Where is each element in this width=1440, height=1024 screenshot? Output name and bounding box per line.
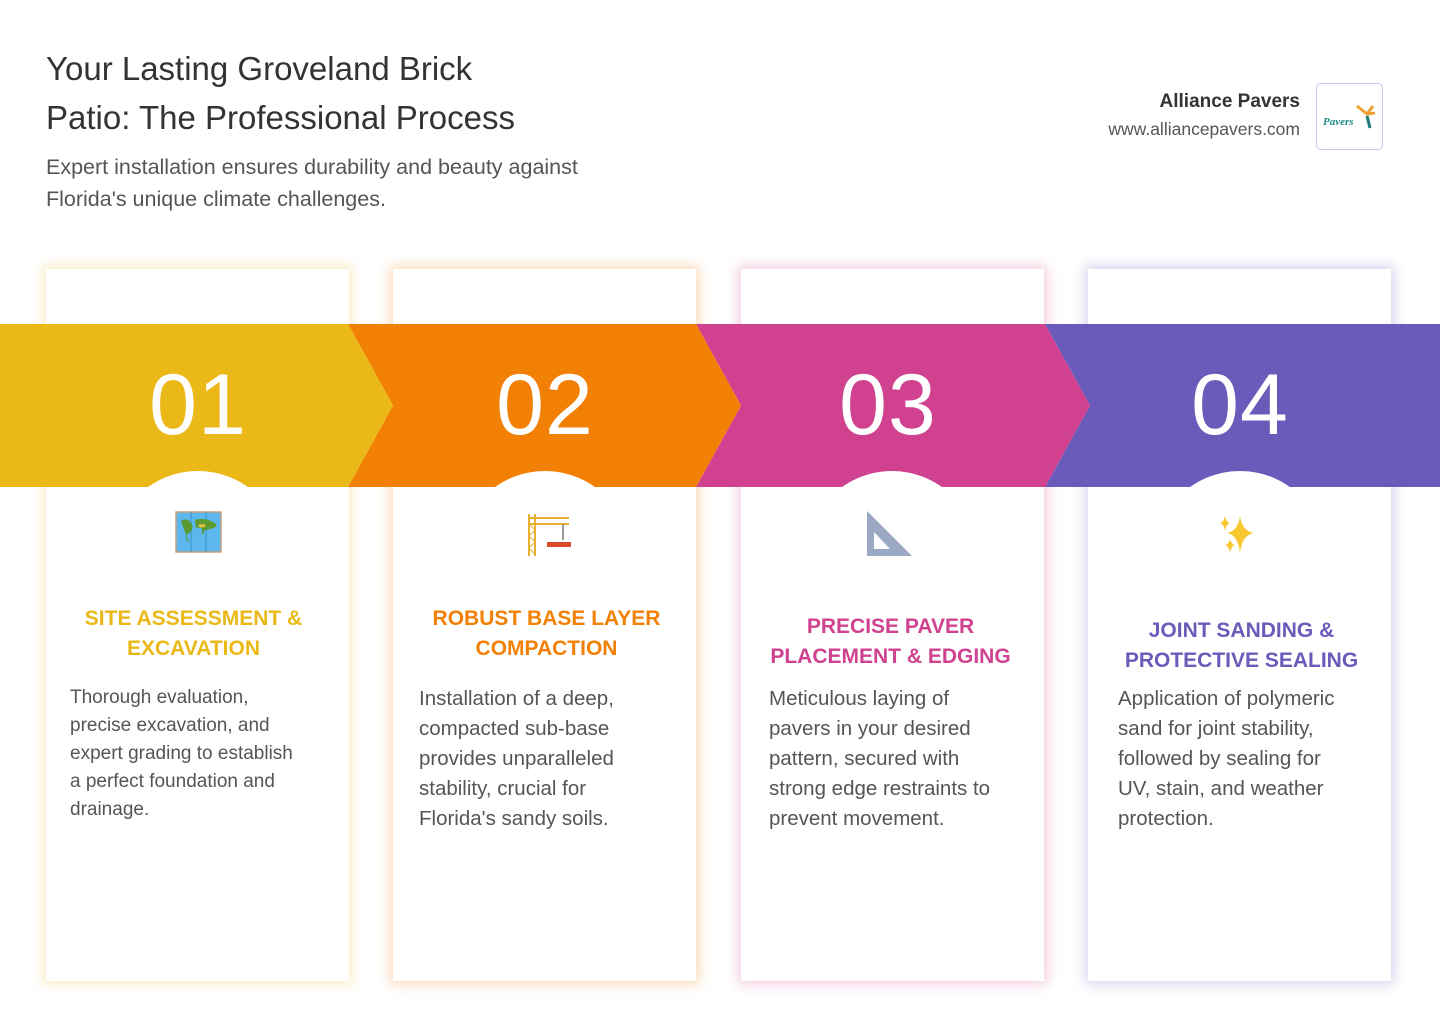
text 4: Application of polymeric sand for joint stability, followed by sealing for UV, stain, and weather protection. bbox=[1118, 687, 1334, 830]
number 02: 02 bbox=[496, 357, 594, 453]
subtitle: Expert installation ensures durability and beauty against Florida's unique climate challenges. bbox=[46, 155, 578, 211]
heading 4: PROTECTIVE SEALING bbox=[1125, 649, 1358, 672]
brand block bbox=[1108, 83, 1383, 150]
text 3: Meticulous laying of pavers in your desired pattern, secured with strong edge restraints to prevent movement. bbox=[769, 687, 990, 830]
card 3 bbox=[741, 269, 1044, 981]
card 1 bbox=[46, 269, 349, 981]
number 04: 04 bbox=[1191, 357, 1289, 453]
logo: Pavers bbox=[1323, 116, 1354, 128]
number 03: 03 bbox=[839, 357, 937, 453]
heading 2: COMPACTION bbox=[476, 637, 617, 660]
card 4 bbox=[1088, 269, 1391, 981]
arrow band bbox=[0, 324, 1440, 487]
icon: set square bbox=[867, 511, 912, 556]
text 2: Installation of a deep, compacted sub-base provides unparalleled stability, crucial for Florida's sandy soils. bbox=[419, 687, 614, 830]
heading 1 bbox=[85, 607, 302, 660]
heading 3 bbox=[770, 615, 1011, 668]
icon: sparkles bbox=[1220, 516, 1254, 553]
heading 4: JOINT SANDING & bbox=[1149, 619, 1334, 642]
number 01: 01 bbox=[149, 357, 247, 453]
heading 1: SITE ASSESSMENT & bbox=[85, 607, 302, 630]
heading 1: EXCAVATION bbox=[127, 637, 260, 660]
icon: crane bbox=[528, 514, 571, 556]
title: Your Lasting Groveland Brick Patio: The Professional Process bbox=[46, 50, 515, 136]
heading 3: PRECISE PAVER bbox=[807, 615, 974, 638]
brand url: www.alliancepavers.com bbox=[1108, 119, 1300, 139]
icon: map bbox=[175, 511, 222, 553]
card 2 bbox=[393, 269, 696, 981]
logo bbox=[1316, 83, 1383, 150]
brand name: Alliance Pavers bbox=[1160, 91, 1300, 112]
heading 2: ROBUST BASE LAYER bbox=[433, 607, 660, 630]
text 1: Thorough evaluation, precise excavation, and expert grading to establish a perfect foundation and drainage. bbox=[70, 687, 293, 820]
heading 3: PLACEMENT & EDGING bbox=[770, 645, 1011, 668]
heading 4 bbox=[1125, 619, 1358, 672]
heading 2 bbox=[433, 607, 660, 660]
